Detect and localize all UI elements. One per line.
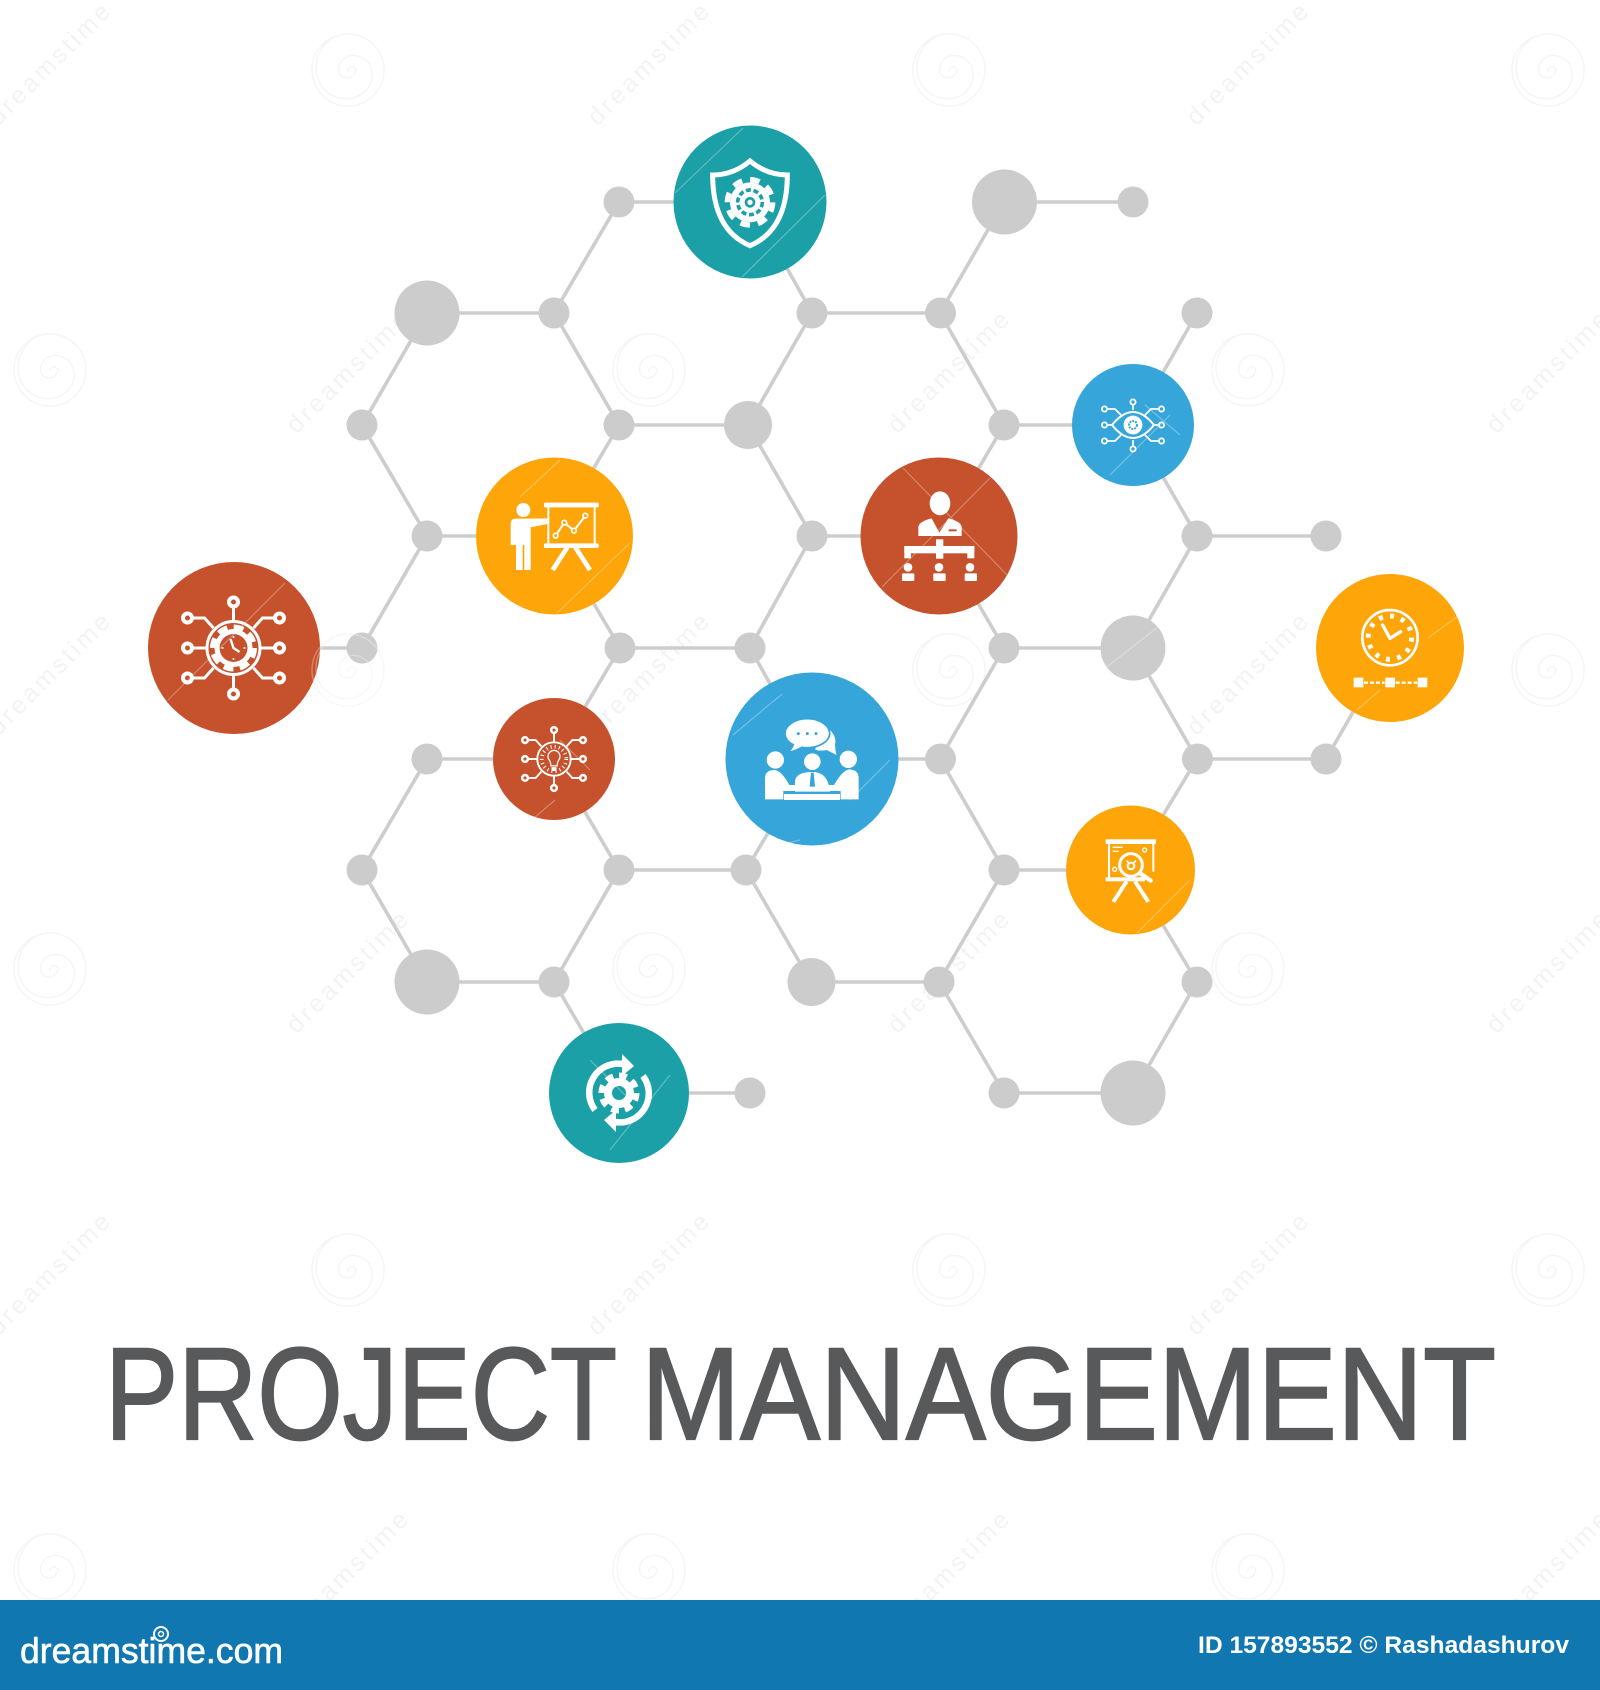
- footer logo: dreamstime.com: dreamstime.com: [20, 1630, 283, 1671]
- badge: board with magnifier (orange): [1066, 806, 1195, 934]
- watermark pattern: dreamstime: [1181, 1208, 1314, 1341]
- watermark pattern: dreamstime: [882, 306, 1015, 439]
- watermark pattern: dreamstime: [281, 906, 414, 1039]
- watermark pattern: dreamstime: [582, 0, 715, 131]
- watermark lines over badges: [168, 128, 1457, 1150]
- badge: lightbulb network (red, small): [493, 698, 615, 820]
- footer credit: ID 157893552 © Rashadashurov: [1198, 1632, 1570, 1659]
- icon: presenter figure: [511, 503, 547, 570]
- watermark pattern: dreamstime: [1181, 0, 1314, 131]
- badge: clock gear network (red, large): [148, 562, 320, 734]
- title: MANAGEMENT: [641, 1320, 1496, 1467]
- watermark pattern: dreamstime: [882, 1506, 1015, 1639]
- badge: presenter at chart board (orange): [476, 458, 633, 614]
- icon: speech bubbles: [785, 719, 837, 755]
- footer bar: [0, 1600, 1600, 1690]
- title: PROJECT: [105, 1320, 617, 1467]
- title: [105, 1320, 1496, 1467]
- badge: project schedule clock (orange): [1316, 574, 1464, 722]
- watermark pattern: dreamstime: [882, 906, 1015, 1039]
- watermark pattern: dreamstime: [582, 1208, 715, 1341]
- grey network nodes: [346, 170, 1342, 1126]
- watermark pattern: dreamstime: [582, 608, 715, 741]
- badge: shield with gear (teal): [674, 126, 826, 278]
- watermark pattern: dreamstime: [281, 1506, 414, 1639]
- watermark pattern: dreamstime: [1181, 608, 1314, 741]
- badge: gear with refresh arrows (teal): [549, 1023, 689, 1163]
- icon: three people at table: [765, 751, 859, 800]
- hexagon network connector lines: [234, 202, 1390, 1093]
- watermark pattern: dreamstime: [281, 306, 414, 439]
- badge: manager org chart (red): [860, 458, 1018, 614]
- icon: chart board: [544, 503, 599, 570]
- badge: eye network (blue): [1072, 364, 1194, 486]
- badge: meeting team with speech bubbles (blue): [726, 672, 898, 846]
